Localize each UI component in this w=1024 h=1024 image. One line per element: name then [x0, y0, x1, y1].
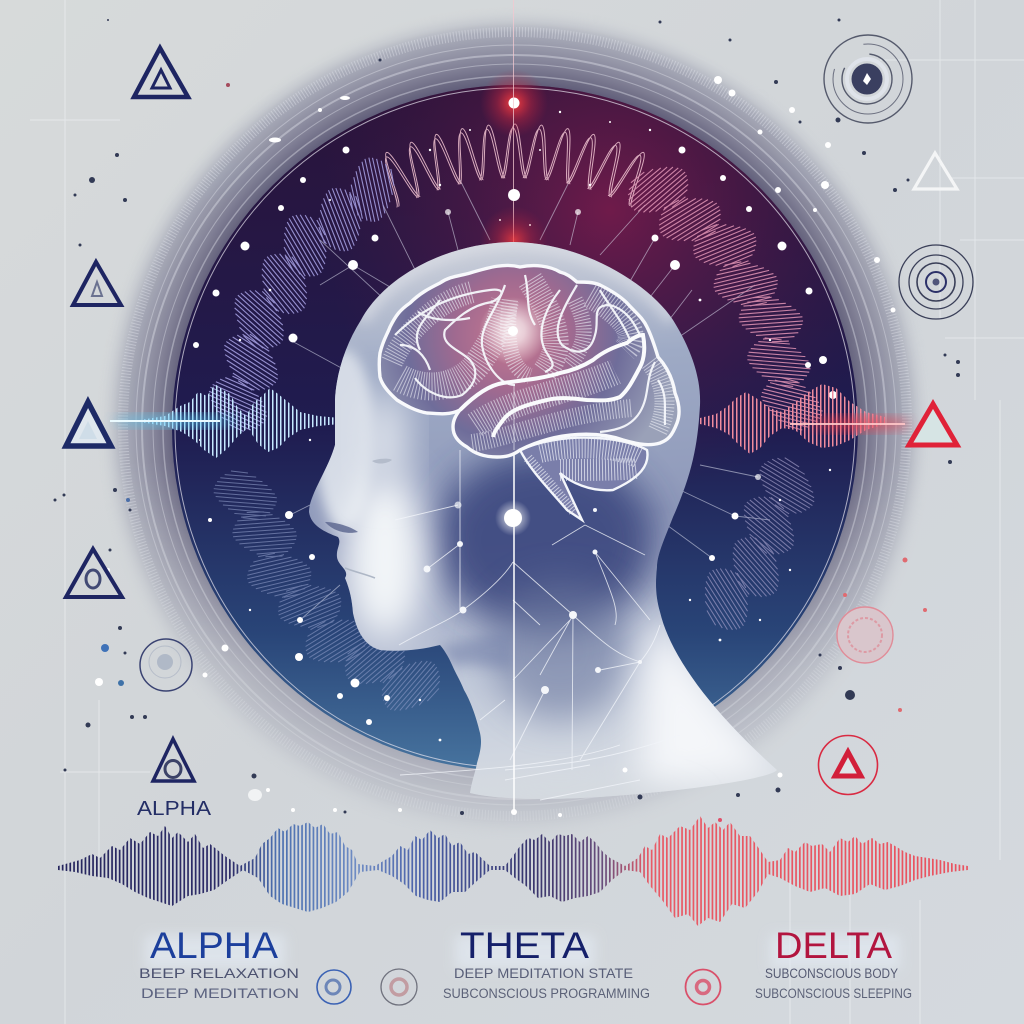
lit neck and shoulder	[640, 610, 780, 790]
top red glow node	[480, 0, 548, 274]
icon: triangle top left	[134, 48, 188, 97]
jaw shadow	[440, 634, 510, 670]
eye	[372, 459, 392, 464]
fine gyri hatching	[392, 280, 665, 443]
icon: concentric circle right	[899, 245, 973, 319]
cerebellum	[520, 438, 648, 520]
icon: triangle above small alpha	[153, 739, 194, 781]
column: alpha	[139, 925, 299, 1001]
column: theta	[443, 925, 650, 1001]
neck stars	[424, 502, 642, 694]
starfield disc	[172, 85, 858, 771]
main gyri lines	[395, 275, 665, 432]
heading: delta: DELTA	[775, 925, 892, 966]
nose shadow	[325, 522, 358, 533]
central vertical line and glowing node	[495, 450, 531, 815]
constellation lines	[290, 180, 770, 620]
lips	[345, 568, 375, 578]
icon: red triangle	[909, 404, 957, 445]
wave: lower right lobes	[686, 453, 822, 639]
cerebrum outline	[379, 265, 679, 457]
wave: upper left lobes	[206, 150, 410, 433]
brain core glow	[479, 297, 547, 365]
bottom waveform	[58, 816, 968, 926]
dome rim	[361, 242, 673, 320]
nose and forehead shade	[315, 350, 375, 530]
icon: red triangle in circle	[818, 736, 878, 794]
scattered colored particles	[101, 83, 927, 822]
wave: lower left lobes	[210, 462, 447, 724]
heading glow band	[145, 935, 900, 969]
head silhouette	[309, 242, 780, 843]
icon: triangle left 4	[66, 549, 122, 597]
icon: red circle	[686, 970, 720, 1004]
dark interior shadow	[435, 450, 655, 630]
icon: thin circle left	[140, 639, 192, 691]
left wave with cyan beam	[110, 416, 340, 426]
icon: grey circle	[381, 969, 417, 1005]
stars	[193, 111, 837, 741]
column: delta	[755, 925, 912, 1001]
icon: concentric circle top right	[824, 35, 912, 123]
neck network lines	[395, 450, 680, 800]
icon: triangle left 3	[66, 402, 111, 446]
radial wave ring	[206, 124, 824, 724]
icon: pale red circle	[837, 607, 893, 663]
icon: white triangle	[914, 153, 957, 189]
icon: blue circle	[317, 970, 351, 1004]
scattered dark particles	[54, 18, 960, 815]
caption: alpha line 2: DEEP MEDITATION	[141, 986, 299, 1001]
wave: upper right lobes	[620, 150, 824, 433]
brain stem hatching	[528, 458, 574, 512]
caption: delta line 2: SUBCONSCIOUS SLEEPING	[755, 986, 912, 1001]
outer halo ring	[97, 7, 933, 843]
right wave with red beam	[700, 418, 910, 430]
ring sparkle particles	[95, 76, 896, 817]
caption: delta line 1: SUBCONSCIOUS BODY	[765, 966, 898, 981]
caption: theta line 1: DEEP MEDITATION STATE	[454, 966, 633, 981]
temporal lobe edge	[460, 335, 644, 437]
brain	[379, 265, 679, 520]
wave: top spikes	[374, 124, 654, 207]
caption: alpha line 1: BEEP RELAXATION	[139, 966, 299, 981]
cerebellum hatching	[540, 447, 640, 470]
lit face	[343, 470, 427, 640]
neck fade at bottom	[430, 787, 690, 843]
caption: theta line 2: SUBCONSCIOUS PROGRAMMING	[443, 986, 650, 1001]
small alpha label: ALPHA	[137, 798, 212, 820]
icon: triangle left 2	[73, 262, 121, 305]
heading: alpha: ALPHA	[150, 925, 278, 966]
heading: theta: THETA	[460, 925, 589, 966]
